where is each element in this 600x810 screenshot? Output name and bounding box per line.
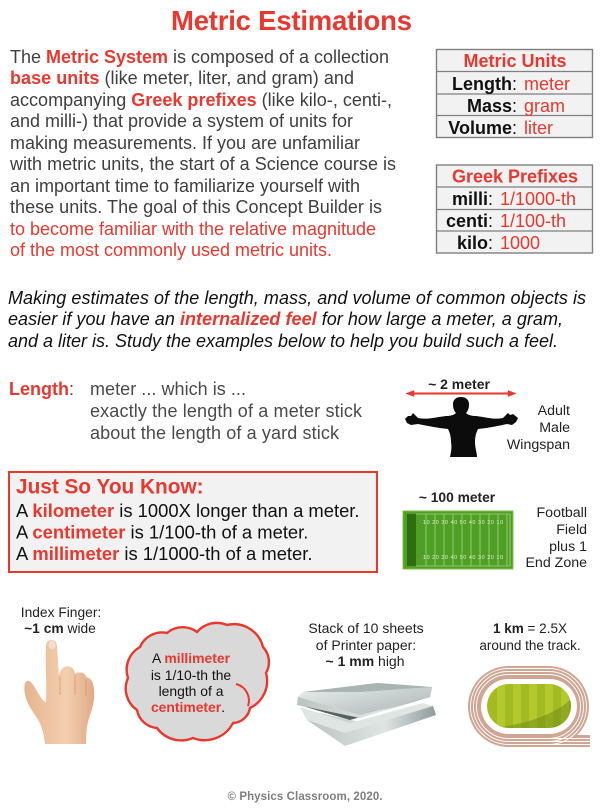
label: stack of printer paper [308,620,424,669]
table: greek prefixes: centi: [446,211,493,231]
icon: football field: 10 20 30 40 50 40 30 20 10 [423,555,503,561]
callout: millimeter cloud: centimeter. [151,699,225,715]
table: greek prefixes: milli: [452,189,493,209]
text block: introduction: The Metric System is composed of a collection [10,47,389,67]
text block: introduction: making measurements. If you are unfamiliar [10,133,360,153]
table: metric units: Length: [452,74,517,94]
icon: adult male silhouette [405,397,518,457]
callout: just so you know: A centimeter is 1/100-th of a meter. [16,522,308,542]
label: football field plus end zone [525,505,587,571]
icon: hand with index finger [24,640,94,744]
text block: introduction: of the most commonly used metric units. [10,240,332,260]
label: adult male wingspan [507,403,570,453]
text block: estimates note: and a liter is. Study the examples below to help you build such a feel. [8,331,558,351]
text block: introduction: base units (like meter, liter, and gram) and [10,68,354,88]
label: adult male wingspan: Wingspan [507,437,570,453]
text block: introduction [9,47,396,260]
label: index finger: ~1 cm wide [24,621,96,636]
callout: millimeter cloud [126,623,269,740]
label: index finger [21,605,101,636]
table: metric units: liter [524,118,553,138]
table: greek prefixes [436,165,593,253]
text block: introduction: to become familiar with the relative magnitude [10,219,376,239]
text block: introduction: these units. The goal of this Concept Builder is [10,197,382,217]
label: adult male wingspan: Adult [538,403,570,419]
label: football field plus end zone: End Zone [525,555,587,571]
table: greek prefixes: 1/100-th [500,211,566,231]
footer: © Physics Classroom, 2020. [228,791,382,803]
icon: running track [468,666,590,747]
callout: just so you know: A kilometer is 1000X longer than a meter. [16,500,360,521]
callout: just so you know [9,472,377,572]
label: football field plus end zone: plus 1 [549,539,587,555]
icon: football field [403,511,513,569]
table: metric units: Mass: [467,96,517,116]
text block: introduction: an important time to familiarize yourself with [10,176,360,196]
label: stack of printer paper: ~ 1 mm high [326,653,404,669]
text block: introduction: and milli-) that provide a system of units for [10,111,353,131]
icon: football field: 10 20 30 40 50 40 30 20 10 [423,520,503,526]
table: greek prefixes: 1000 [500,233,540,253]
label: one km around the track: 1 km = 2.5X [493,621,567,636]
callout: just so you know: Just So You Know: [16,476,204,498]
text block: length definition: about the length of a yard stick [90,423,340,443]
table: greek prefixes: kilo: [457,233,493,253]
text block: estimates note: Making estimates of the length, mass, and volume of common objects is [8,288,586,308]
callout: millimeter cloud: length of a [159,683,224,699]
title: Metric Estimations [171,5,412,36]
label: one km around the track: around the track. [479,638,581,653]
label: stack of printer paper: of Printer paper: [316,637,416,653]
label: football field plus end zone: Field [556,522,587,538]
text block: introduction: with metric units, the start of a Science course is [9,154,396,174]
label: index finger: Index Finger: [21,605,101,620]
arrow: wingspan width [406,390,516,396]
table: metric units: gram [524,96,565,116]
label: adult male wingspan: Male [539,420,570,436]
label: stack of printer paper: Stack of 10 sheets [308,620,424,636]
text block: length definition: meter ... which is ... [90,379,246,399]
callout: just so you know: A millimeter is 1/1000-th of a meter. [16,543,312,564]
label: 2 meter: ~ 2 meter [428,376,490,392]
text block: length definition: exactly the length of a meter stick [90,401,363,421]
label: one km around the track [479,621,581,653]
table: metric units [436,50,593,138]
icon: paper stack [297,683,436,746]
text block: estimates note [8,288,586,351]
table: greek prefixes: 1/1000-th [500,189,576,209]
callout: millimeter cloud: A millimeter [152,650,231,666]
table: metric units: Metric Units [463,51,567,71]
label: football field plus end zone: Football [537,505,587,521]
text block: length definition [9,379,363,443]
text block: introduction: accompanying Greek prefixes (like kilo-, centi-, [10,90,392,110]
table: metric units: Volume: [448,118,517,138]
callout: millimeter cloud: is 1/10-th the [151,667,231,683]
label: 100 meter: ~ 100 meter [419,490,496,505]
text block: estimates note: easier if you have an internalized feel for how large a meter, a gram, [8,309,563,329]
table: metric units: meter [524,74,570,94]
text block: length definition: Length: [9,379,74,399]
table: greek prefixes: Greek Prefixes [452,166,578,186]
